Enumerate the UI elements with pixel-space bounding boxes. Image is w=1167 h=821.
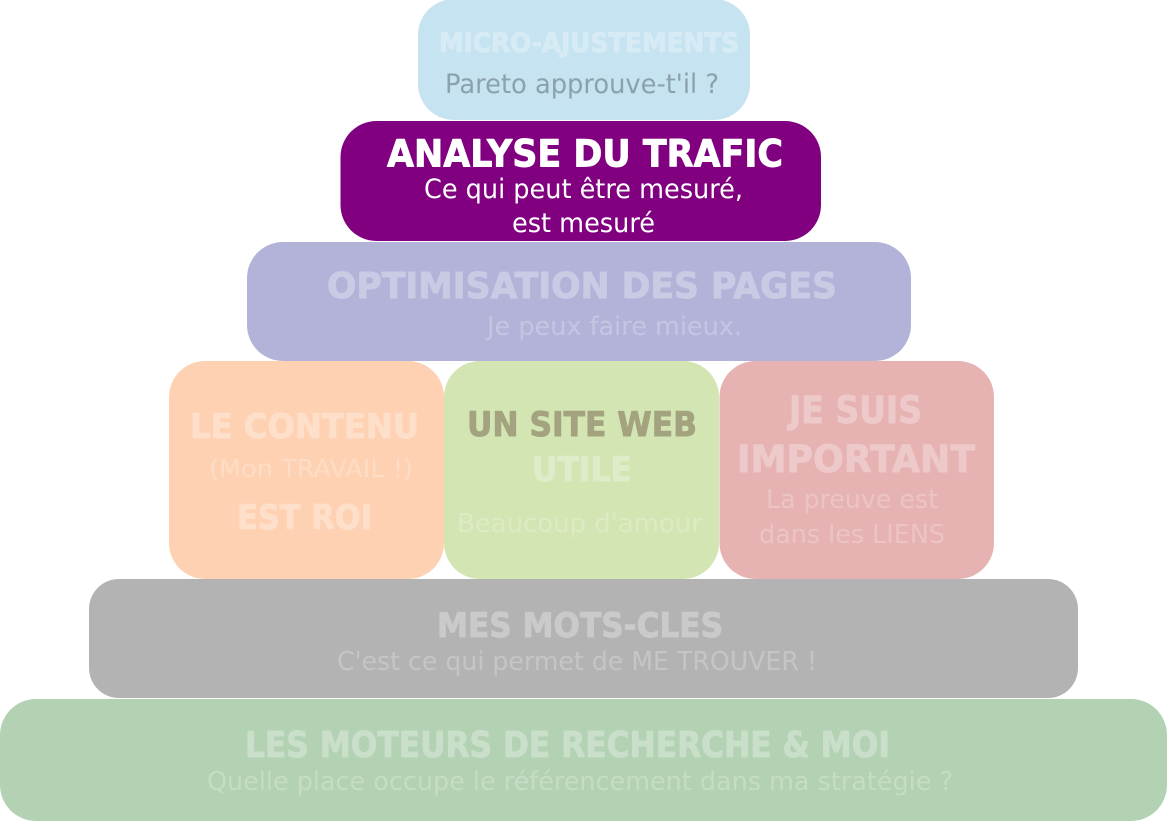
heading: mots-cles: MES MOTS-CLES — [437, 606, 723, 646]
heading: moteurs: LES MOTEURS DE RECHERCHE & MOI — [245, 725, 890, 766]
text: mesure line 2: est mesuré — [512, 208, 655, 239]
panel: mes mots-cles — [89, 579, 1078, 698]
text: pareto: Pareto approuve-t'il ? — [445, 69, 719, 100]
panel: micro-ajustements — [418, 0, 750, 120]
text: mon travail: (Mon TRAVAIL !) — [209, 454, 413, 483]
heading: utile: UTILE — [532, 450, 632, 490]
panel: un site web utile — [444, 361, 719, 579]
heading: micro-ajustements: MICRO-AJUSTEMENTS — [439, 28, 739, 59]
text: beaucoup d'amour: Beaucoup d'amour — [457, 509, 702, 539]
text: la preuve: La preuve est — [766, 485, 938, 515]
heading: le contenu: LE CONTENU — [190, 407, 419, 447]
heading: est roi: EST ROI — [237, 498, 372, 538]
heading: je suis: JE SUIS — [786, 389, 922, 432]
text: strategie: Quelle place occupe le référencement dans ma stratégie ? — [207, 767, 953, 797]
text: dans les liens: dans les LIENS — [759, 520, 945, 550]
heading: important: IMPORTANT — [737, 438, 976, 481]
panel: le contenu — [169, 361, 444, 579]
panel: analyse du trafic — [340, 121, 821, 241]
heading: optimisation: OPTIMISATION DES PAGES — [327, 266, 837, 307]
panel: optimisation des pages — [247, 242, 911, 361]
text: me trouver: C'est ce qui permet de ME TROUVER ! — [337, 647, 817, 677]
heading: un site web: UN SITE WEB — [467, 405, 697, 445]
heading: analyse du trafic: ANALYSE DU TRAFIC — [387, 132, 783, 176]
panel: je suis important — [720, 361, 994, 579]
panel: moteurs de recherche — [0, 699, 1167, 821]
text: faire mieux: Je peux faire mieux. — [485, 312, 742, 342]
text: mesure line 1: Ce qui peut être mesuré, — [424, 174, 743, 205]
